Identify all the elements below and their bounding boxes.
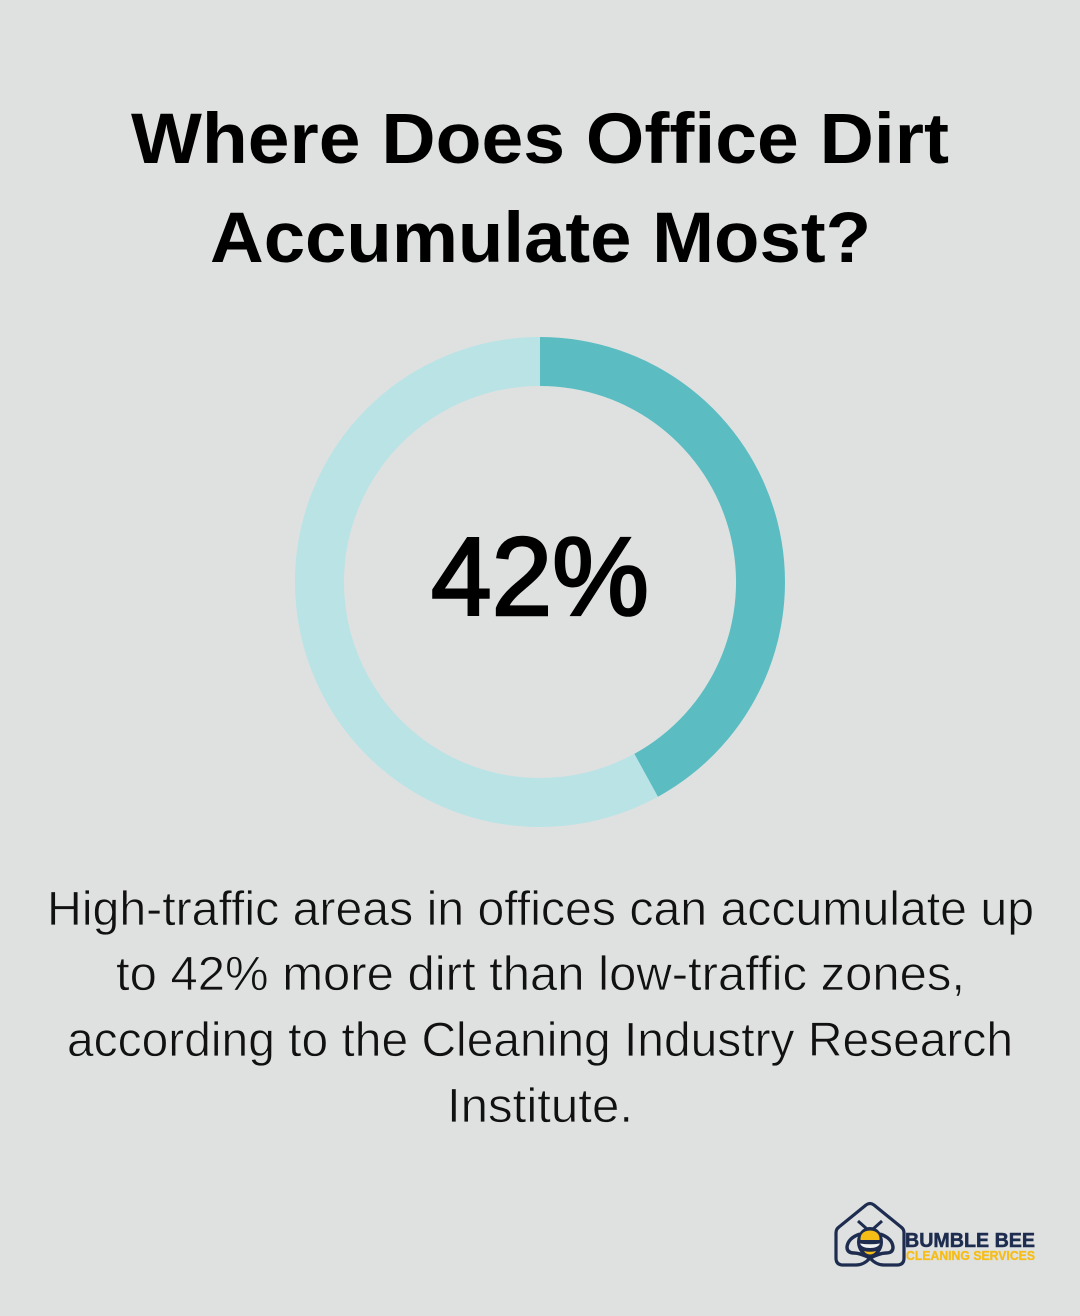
description text	[47, 883, 1034, 1133]
donut value: 42%	[431, 515, 649, 639]
logo tagline: CLEANING SERVICES	[906, 1249, 1035, 1263]
title: Accumulate Most?	[210, 199, 871, 278]
description text: Institute.	[447, 1080, 633, 1133]
logo: Bumble Bee Cleaning Services	[836, 1204, 1035, 1265]
description text: to 42% more dirt than low-traffic zones,	[116, 948, 965, 1001]
donut chart: 42%	[320, 337, 785, 802]
title	[131, 100, 949, 278]
icon: house with bee	[836, 1204, 904, 1265]
description text: according to the Cleaning Industry Research	[67, 1014, 1013, 1067]
title: Where Does Office Dirt	[131, 100, 949, 179]
description text: High-traffic areas in offices can accumulate up	[47, 883, 1034, 936]
logo wordmark: BUMBLE BEE	[905, 1230, 1035, 1252]
